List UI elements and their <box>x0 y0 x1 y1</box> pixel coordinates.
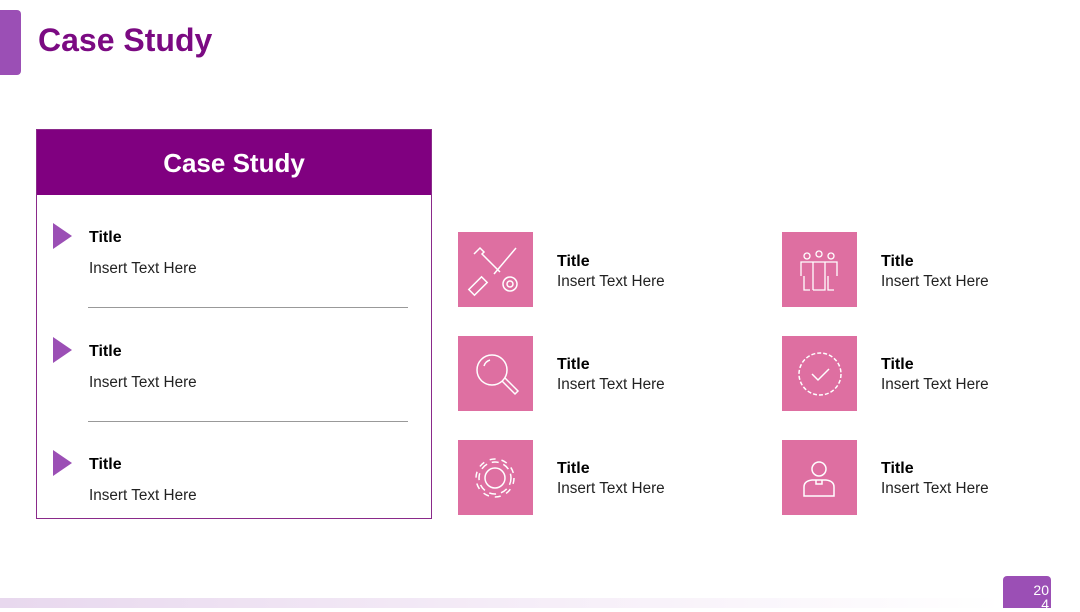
text: item team: Title <box>881 253 914 270</box>
text: item search: Title <box>557 356 590 373</box>
item 2 <box>53 337 197 391</box>
item 3: Insert Text Here <box>89 487 197 504</box>
item 2: Title <box>89 343 122 360</box>
icon: search <box>458 336 533 411</box>
text: item team <box>881 253 989 290</box>
page number: 20 <box>1033 582 1049 598</box>
title: Case Study <box>38 22 212 58</box>
text: item badge <box>881 356 989 393</box>
text: item tools <box>557 253 665 290</box>
item 1: Insert Text Here <box>89 260 197 277</box>
page number <box>1003 576 1051 608</box>
icon: badge check <box>782 336 857 411</box>
accent bar <box>0 10 21 75</box>
text: item gear: Insert Text Here <box>557 480 665 497</box>
text: item search: Insert Text Here <box>557 376 665 393</box>
text: item gear <box>557 460 665 497</box>
panel header <box>37 130 431 195</box>
panel header: Case Study <box>163 148 305 178</box>
text: item gear: Title <box>557 460 590 477</box>
icon: gear <box>458 440 533 515</box>
text: item person: Title <box>881 460 914 477</box>
text: item team: Insert Text Here <box>881 273 989 290</box>
page number: 4 <box>1041 596 1049 612</box>
icon: person <box>782 440 857 515</box>
text: item badge: Insert Text Here <box>881 376 989 393</box>
icon: team <box>782 232 857 307</box>
text: item person: Insert Text Here <box>881 480 989 497</box>
item 1 <box>53 223 197 277</box>
text: item search <box>557 356 665 393</box>
item 2: Insert Text Here <box>89 374 197 391</box>
panel: case study list <box>36 129 432 519</box>
item 3: Title <box>89 456 122 473</box>
item 3 <box>53 450 197 504</box>
text: item tools: Title <box>557 253 590 270</box>
item 1: Title <box>89 229 122 246</box>
bottom gradient strip <box>0 598 1003 608</box>
text: item person <box>881 460 989 497</box>
text: item tools: Insert Text Here <box>557 273 665 290</box>
text: item badge: Title <box>881 356 914 373</box>
icon: tools <box>458 232 533 307</box>
